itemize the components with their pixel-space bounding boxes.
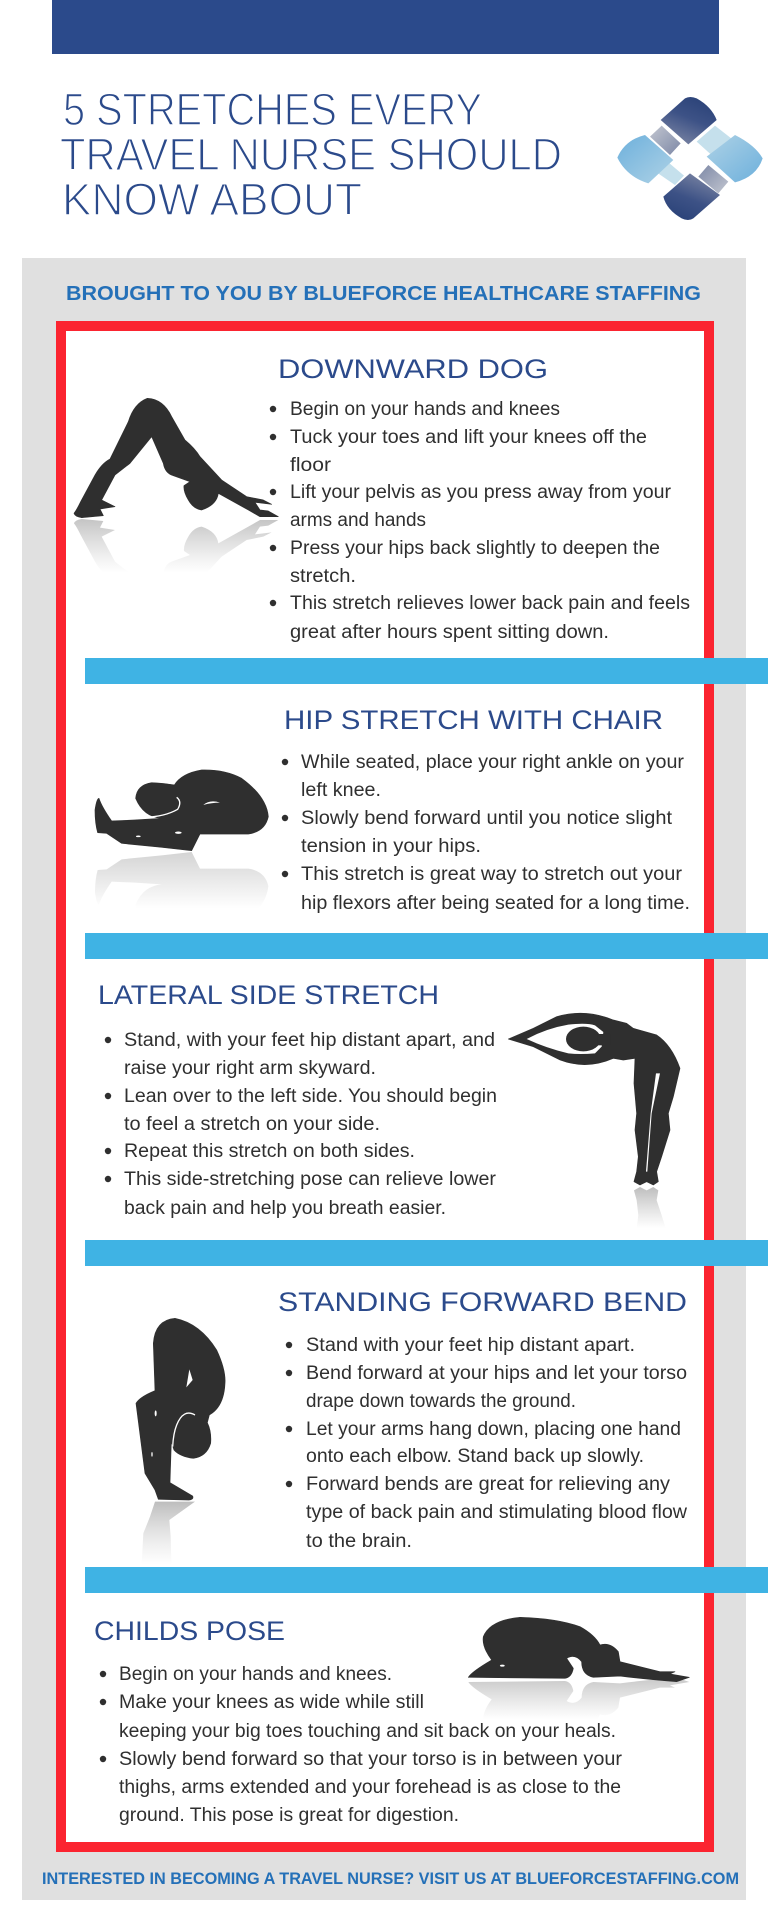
icon: blueforce logo — [617, 97, 763, 220]
bullet list: lateral stretch — [105, 1030, 497, 1219]
bullet list: downward dog: This stretch relieves lower back pain and feels — [290, 593, 690, 614]
bullet list: lateral stretch: This side-stretching pose can relieve lower — [124, 1169, 497, 1190]
bullet list: downward dog: great after hours spent sitting down. — [290, 622, 609, 643]
panel: childs pose — [94, 1616, 689, 1826]
bullet list: lateral stretch: Lean over to the left side. You should begin — [124, 1086, 497, 1107]
divider bar 4 — [85, 1567, 768, 1593]
bullet list: childs pose: Begin on your hands and knees. — [119, 1664, 392, 1685]
bullet list: childs pose: Slowly bend forward so that your torso is in between your — [119, 1749, 623, 1770]
icon: forward bend silhouette — [136, 1318, 225, 1565]
title: TRAVEL NURSE SHOULD — [60, 129, 562, 180]
bullet list: forward bend: Let your arms hang down, placing one hand — [306, 1419, 681, 1440]
icon: hip stretch silhouette — [95, 770, 268, 933]
sponsor line: BROUGHT TO YOU BY BLUEFORCE HEALTHCARE STAFFING — [66, 283, 701, 305]
bullet list: downward dog — [270, 399, 690, 643]
bullet list: forward bend: Forward bends are great for relieving any — [306, 1474, 671, 1495]
bullet list: childs pose: Make your knees as wide while still — [119, 1692, 424, 1713]
bullet list: hip stretch: hip flexors after being seated for a long time. — [301, 893, 690, 914]
panel: standing forward bend — [136, 1287, 687, 1565]
heading: standing forward bend: STANDING FORWARD BEND — [278, 1287, 687, 1317]
icon: lateral stretch silhouette — [508, 1013, 680, 1359]
bullet list: forward bend: to the brain. — [306, 1531, 412, 1552]
bullet list: hip stretch — [282, 752, 690, 914]
bullet list: lateral stretch: to feel a stretch on your side. — [124, 1114, 380, 1135]
heading: childs pose: CHILDS POSE — [94, 1616, 285, 1646]
bullet list: forward bend — [286, 1335, 687, 1552]
bullet list: downward dog: Lift your pelvis as you press away from your — [290, 482, 672, 503]
footer call to action: INTERESTED IN BECOMING A TRAVEL NURSE? VISIT US AT BLUEFORCESTAFFING.COM — [42, 1870, 739, 1888]
bullet list: forward bend: drape down towards the ground. — [306, 1391, 576, 1412]
divider bar 3 — [85, 1240, 768, 1266]
bullet list: hip stretch: This stretch is great way to stretch out your — [301, 864, 683, 885]
bullet list: hip stretch: left knee. — [301, 780, 381, 801]
title: KNOW ABOUT — [62, 174, 362, 225]
bullet list: downward dog: floor — [290, 455, 332, 476]
panel: downward dog — [74, 354, 690, 643]
bullet list: downward dog: Tuck your toes and lift your knees off the — [290, 427, 647, 448]
bullet list: childs pose: keeping your big toes touching and sit back on your heals. — [119, 1721, 616, 1742]
bullet list: forward bend: Stand with your feet hip distant apart. — [306, 1335, 635, 1356]
divider bar 2 — [85, 933, 768, 959]
bullet list: downward dog: Press your hips back slightly to deepen the — [290, 538, 660, 559]
bullet list: forward bend: onto each elbow. Stand back up slowly. — [306, 1446, 644, 1467]
bullet list: lateral stretch: Stand, with your feet hip distant apart, and — [124, 1030, 495, 1051]
heading: hip stretch: HIP STRETCH WITH CHAIR — [284, 705, 663, 735]
bullet list: childs pose — [100, 1664, 623, 1826]
bullet list: downward dog: stretch. — [290, 566, 356, 587]
panel: red framed content box — [61, 326, 709, 1847]
bullet list: hip stretch: While seated, place your right ankle on your — [301, 752, 685, 773]
bullet list: downward dog: Begin on your hands and knees — [290, 399, 560, 420]
title: 5 STRETCHES EVERY — [63, 84, 482, 135]
bullet list: lateral stretch: raise your right arm skyward. — [124, 1058, 376, 1079]
bullet list: downward dog: arms and hands — [290, 510, 426, 531]
title — [60, 84, 562, 225]
icon: childs pose silhouette — [468, 1617, 689, 1742]
bullet list: lateral stretch: back pain and help you breath easier. — [124, 1198, 446, 1219]
divider bar 1 — [85, 658, 768, 684]
bullet list: forward bend: Bend forward at your hips and let your torso — [306, 1363, 687, 1384]
bullet list: lateral stretch: Repeat this stretch on both sides. — [124, 1141, 415, 1162]
top banner — [52, 0, 719, 54]
heading: downward dog: DOWNWARD DOG — [278, 354, 548, 384]
bullet list: hip stretch: Slowly bend forward until you notice slight — [301, 808, 673, 829]
panel: hip stretch with chair — [95, 705, 690, 933]
bullet list: childs pose: ground. This pose is great for digestion. — [119, 1805, 459, 1826]
bullet list: childs pose: thighs, arms extended and your forehead is as close to the — [119, 1777, 621, 1798]
icon: downward dog silhouette — [74, 398, 278, 638]
bullet list: hip stretch: tension in your hips. — [301, 836, 481, 857]
heading: lateral side stretch: LATERAL SIDE STRETCH — [98, 980, 439, 1010]
panel: lateral side stretch — [98, 980, 680, 1359]
bullet list: forward bend: type of back pain and stimulating blood flow — [306, 1502, 687, 1523]
